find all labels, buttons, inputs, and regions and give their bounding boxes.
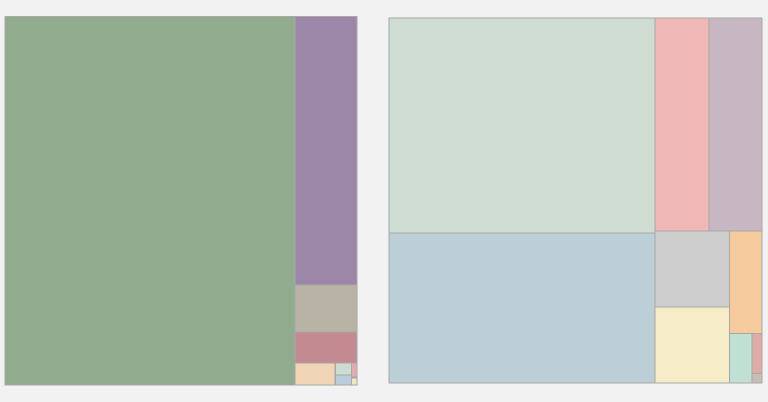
cell: dusty rose [752,334,762,374]
cell: gray [655,231,730,307]
cell: green [5,16,295,385]
cell: taupe [295,285,357,332]
cell: tan [752,374,762,383]
cell: pink [352,363,357,377]
cell: purple [295,16,357,285]
cell: pink [655,18,709,231]
cell: cream [655,307,730,383]
cell: orange [730,231,762,334]
cell: pale yellow [352,378,357,385]
cell: mauve [709,18,762,231]
cell: mint [730,334,752,383]
cell: pale green [389,18,655,233]
treemap: left [5,16,357,385]
cell: peach [295,363,335,385]
cell: pale blue [389,233,655,383]
cell: rose [295,332,357,363]
cell: pale green [336,363,352,375]
cell: pale blue [336,375,352,385]
treemap: right [389,18,762,383]
